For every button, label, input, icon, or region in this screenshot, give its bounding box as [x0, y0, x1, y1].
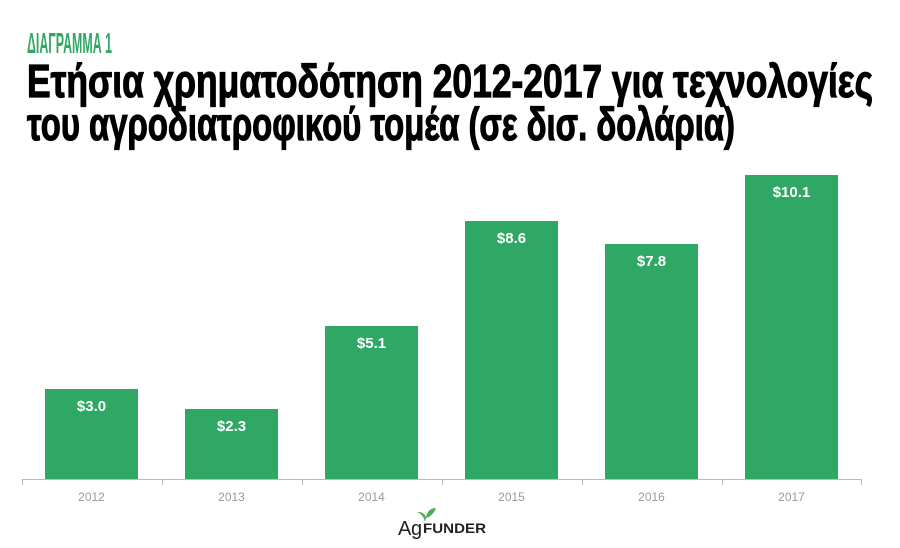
bar: 2012: $3.0 — [77, 398, 106, 415]
bar: 2013: $2.3 — [217, 418, 246, 435]
logo: AgFunder: FUNDER — [423, 520, 486, 536]
bar: 2017: $10.1 — [773, 184, 810, 201]
logo: AgFunder: g — [411, 518, 422, 540]
logo: AgFunder — [398, 508, 486, 540]
bar: 2013 — [185, 409, 278, 479]
x-axis labels: 2017 — [778, 490, 805, 504]
bar: 2016 — [605, 244, 698, 479]
bar chart — [22, 175, 862, 504]
x-axis labels: 2012 — [78, 490, 105, 504]
logo: AgFunder: A — [398, 518, 412, 540]
bar: 2012 — [45, 389, 138, 479]
x-axis labels — [78, 490, 805, 504]
bar: 2015 — [465, 221, 558, 479]
x-axis labels: 2016 — [638, 490, 665, 504]
x-axis labels: 2013 — [218, 490, 245, 504]
x-axis labels: 2014 — [358, 490, 385, 504]
bar: 2016: $7.8 — [637, 253, 666, 270]
x-axis labels: 2015 — [498, 490, 525, 504]
bar: 2014: $5.1 — [357, 335, 386, 352]
title — [27, 55, 873, 150]
text: ΔΙΑΓΡΑΜΜΑ 1 — [27, 28, 112, 60]
bar: 2015: $8.6 — [497, 230, 526, 247]
bar: 2014 — [325, 326, 418, 479]
bar: 2017 — [745, 175, 838, 479]
